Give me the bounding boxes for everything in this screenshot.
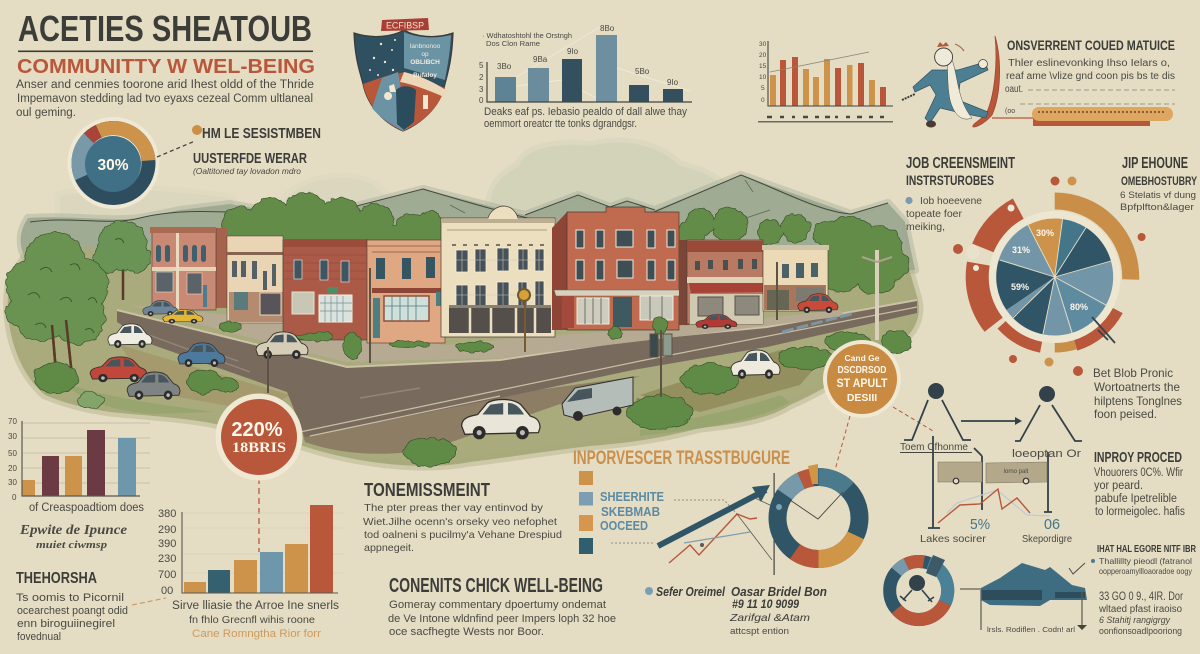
bottom-left bar chart: 20 xyxy=(8,464,17,473)
donut: 30% xyxy=(64,114,163,212)
subtitle: COMMUNITTY W WEL-BEING xyxy=(17,56,315,78)
shield emblem xyxy=(354,18,453,131)
text: Tonemissmeint: tod oalneni s pucilmy'a Vehane Drespiud xyxy=(364,529,562,541)
stick diagram: Lakes socirer xyxy=(920,533,987,545)
trees left xyxy=(6,221,150,376)
top-middle bar chart: 5Bo xyxy=(635,67,650,76)
top-middle bar chart: 5 xyxy=(479,61,484,70)
text: lower right notes: wltaed pfast iraoiso xyxy=(1098,604,1182,615)
center-bottom bar chart xyxy=(158,505,344,640)
center-bottom bar chart: 00 xyxy=(161,585,173,597)
top-middle bar chart: 0 xyxy=(479,96,484,105)
shield emblem: op xyxy=(421,51,429,58)
building: red brick block xyxy=(283,239,368,340)
top-middle bar chart: 9Io xyxy=(567,47,579,56)
text: Thehorsha: THEHORSHA xyxy=(16,570,97,587)
text: Conenits Chick Well-Being: CONENITS CHICK WELL-BEING xyxy=(389,575,603,597)
note beside pie: Wortoatnerts the xyxy=(1094,380,1180,394)
red callout circle xyxy=(216,394,302,552)
cars xyxy=(90,294,838,439)
note beside pie: hilptens Tonglnes xyxy=(1094,394,1182,408)
orange callout circle: DESIII xyxy=(847,392,877,404)
tent icon xyxy=(960,563,1087,634)
stick diagram: 06 xyxy=(1044,516,1060,533)
text: Conenits Chick Well-Being: Gomeray commentary dpoertumy ondemat xyxy=(389,599,606,611)
donut callout: (Oaltitoned tay lovadon mdro xyxy=(193,167,302,176)
title: ACETIES SHEATOUB xyxy=(18,8,312,49)
center-bottom bar chart: 230 xyxy=(158,553,176,565)
text: Thehorsha: ocearchest poangt odid xyxy=(17,605,128,617)
road xyxy=(117,300,917,437)
text: Inproy Proced: to lormeigolec. hafis xyxy=(1095,506,1185,518)
text: lower right notes: oonfionsoadlpooriong xyxy=(1099,626,1182,636)
donut: 30%: 30% xyxy=(97,157,129,174)
text: top right block: oaut. xyxy=(1005,84,1023,95)
text: Conenits Chick Well-Being: de Ve Intone wldnfind peer Impers loph 32 hoe xyxy=(388,613,616,625)
orange callout circle: DSCDRSOD xyxy=(838,365,886,376)
trend arrow and line xyxy=(658,473,775,575)
building: cream low block xyxy=(227,236,283,323)
job heading left: topeate foer xyxy=(906,209,963,220)
orange callout circle xyxy=(823,340,933,470)
note under donut: #9 11 10 9099 xyxy=(732,599,800,611)
top-right bar chart: 20 xyxy=(759,52,767,59)
big pie chart with rings: 59% xyxy=(1011,282,1029,292)
text: Thehorsha: fovednual xyxy=(17,631,61,643)
top-middle bar chart xyxy=(479,24,692,130)
top-middle bar chart: 3 xyxy=(479,85,484,94)
landscape illustration xyxy=(6,143,919,466)
text: Inproy Proced xyxy=(1094,449,1185,518)
top-middle bar chart: 8Bo xyxy=(600,24,615,33)
center-bottom bar chart: Sirve lliasie the Arroe Ine snerls xyxy=(172,600,339,612)
tent icon: lrsls. Rodiflen . Codn! arl xyxy=(987,625,1075,634)
street poles xyxy=(268,250,892,397)
top-middle bar chart: Dos Clon Rame xyxy=(486,39,540,48)
top-middle bar chart: 2 xyxy=(479,73,484,82)
text: Tonemissmeint: The pter preas ther vay entinvod by xyxy=(364,502,544,514)
legend: OOCEED xyxy=(600,519,648,533)
text: Inproy Proced: yor peard. xyxy=(1094,480,1143,492)
bottom-left bar chart xyxy=(8,417,150,551)
red callout circle: 18BRIS xyxy=(232,440,286,456)
big pie chart with rings: 30% xyxy=(1036,228,1054,238)
shield emblem: Ianbnonoo xyxy=(410,43,441,50)
note beside pie: foon peised. xyxy=(1094,407,1157,421)
bottom-left bar chart: 0 xyxy=(12,493,17,502)
orange callout circle: Cand Ge xyxy=(845,353,880,363)
note beside pie xyxy=(1093,366,1182,421)
stick diagram: Skepordigre xyxy=(1022,533,1072,545)
stick diagram: loeoptan Or xyxy=(1012,448,1081,460)
big donut chart xyxy=(761,461,876,575)
text: lower right notes: Thallillty pieodl (fatranol xyxy=(1099,556,1192,566)
bottom-left bar chart: Epwite de Ipunce xyxy=(19,523,127,538)
shield emblem: OBLIBCH xyxy=(410,59,440,66)
job heading right xyxy=(1120,155,1197,213)
small donut icon xyxy=(878,550,960,631)
top-right bar chart: 10 xyxy=(759,74,767,81)
top-right bar chart xyxy=(758,41,893,122)
big pie chart with rings xyxy=(947,169,1163,385)
text: Thehorsha: enn biroguiinegirel xyxy=(17,618,115,630)
center-bottom bar chart: Cane Romngtha Rior forr xyxy=(192,628,321,640)
center-bottom bar chart: 390 xyxy=(158,538,176,550)
intro text: oul geming. xyxy=(16,107,76,119)
sausage-shaped strip xyxy=(1032,107,1173,126)
job heading left xyxy=(905,155,1015,233)
note under donut: Zarifgal &Atam xyxy=(729,612,810,624)
top-right bar chart: 0 xyxy=(761,97,765,104)
infrastructure heading: INPORVESCER TRASSTBUGURE xyxy=(573,448,790,469)
note under donut: attcspt ention xyxy=(730,626,789,636)
donut callout xyxy=(157,125,321,176)
building: large brick block xyxy=(552,207,680,330)
sidewalk xyxy=(130,305,845,362)
job heading left: Iob hoeevene xyxy=(920,196,982,207)
center-bottom bar chart: 700 xyxy=(158,569,176,581)
text: Tonemissmeint: Wiet.Jilhe ocenn's orseky veo nefophet xyxy=(363,516,557,528)
note under donut xyxy=(645,585,827,636)
stick diagram: 5% xyxy=(970,516,990,533)
top-middle bar chart: · Wdhatoshtohl the Orstngh xyxy=(482,31,572,40)
top-middle bar chart: oemmort oreatcr tte tonks dgrandgsr. xyxy=(484,118,637,130)
text: lower right notes xyxy=(1091,543,1196,636)
building: cream hall xyxy=(441,206,555,337)
text: Tonemissmeint: appnegeit. xyxy=(364,542,414,554)
figure with blade xyxy=(902,36,1033,128)
bottom-left bar chart: 30 xyxy=(8,478,17,487)
bottom-left bar chart: 70 xyxy=(8,417,17,426)
bottom-left bar chart: of Creaspoadtiom does xyxy=(29,502,144,514)
shield emblem: Bufaloy xyxy=(413,72,437,79)
note under donut: Sefer Oreimel xyxy=(656,585,725,599)
ground wash xyxy=(8,250,919,466)
text: Conenits Chick Well-Being: oce sacfhegte Wests nor Boor. xyxy=(389,626,544,638)
bottom-left bar chart: 30 xyxy=(8,432,17,441)
job heading left: meiking, xyxy=(906,222,945,233)
text: top right block xyxy=(1005,37,1175,115)
top-right bar chart: 5 xyxy=(761,85,765,92)
shield emblem: ECFIBSP xyxy=(386,20,424,30)
legend: SKEBMAB xyxy=(601,505,660,519)
stick diagram xyxy=(900,383,1082,545)
text: Tonemissmeint: TONEMISSMEINT xyxy=(364,480,490,500)
note beside pie: Bet Blob Pronic xyxy=(1093,366,1173,380)
building: brick shop with awning xyxy=(679,240,768,325)
building: tan corner block xyxy=(367,240,445,343)
donut callout: HM LE SESISTMBEN xyxy=(202,125,321,142)
text: top right block: (oo xyxy=(1005,108,1015,115)
sky haze xyxy=(60,143,740,225)
note under donut: Oasar Bridel Bon xyxy=(731,585,827,599)
center-bottom bar chart: fn fhlo Grecnfl wihis roone xyxy=(189,614,315,626)
big pie chart with rings: 80% xyxy=(1070,302,1088,312)
bushes xyxy=(34,317,912,466)
text: Thehorsha: Ts oomis to Picornil xyxy=(16,592,124,604)
donut callout: UUSTERFDE WERAR xyxy=(193,150,307,167)
stick diagram: lorno palt xyxy=(1004,469,1029,475)
top-middle bar chart: Deaks eaf ps. Iebasio pealdo of dall alwe thay xyxy=(484,106,687,118)
red callout circle: 220% xyxy=(231,419,283,441)
text: lower right notes: 6 Stahitj rangigrgy xyxy=(1099,615,1170,625)
center-bottom bar chart: 380 xyxy=(158,508,176,520)
stick diagram: Toem Cfhonme xyxy=(900,442,968,453)
top-right bar chart: 30 xyxy=(759,41,767,48)
job heading left: JOB CREENSMEINT xyxy=(906,155,1015,172)
text: Inproy Proced: Vhouorers 0C%. Wfir xyxy=(1094,467,1183,479)
text: Inproy Proced: pabufe Ipetrelible xyxy=(1095,493,1177,505)
title block xyxy=(16,8,315,119)
top-right bar chart: 15 xyxy=(759,63,767,70)
big pie chart with rings: 31% xyxy=(1012,245,1030,255)
top-middle bar chart: 3Bo xyxy=(497,62,512,71)
text: top right block: Thler eslinevonking Ihso Ielars o, xyxy=(1008,58,1170,69)
mountains xyxy=(21,175,915,270)
top-middle bar chart: 9Io xyxy=(667,78,679,87)
job heading left: INSTRSTUROBES xyxy=(906,172,994,188)
legend: SHEERHITE xyxy=(600,490,664,504)
bottom-left bar chart: muiet ciwmsp xyxy=(36,540,107,551)
back trees xyxy=(222,193,909,294)
building: cream corner shop xyxy=(762,245,829,311)
intro text: Anser and cenmies toorone arid Ihest oldd of the Thride xyxy=(16,79,314,91)
bottom-left bar chart: 50 xyxy=(8,449,17,458)
text: Thehorsha xyxy=(16,570,166,643)
center-bottom bar chart: 290 xyxy=(158,524,176,536)
top-middle bar chart: 9Ba xyxy=(533,55,548,64)
text: top right block: reaf ame \vlize gnd coon pis bs te dis xyxy=(1006,71,1175,82)
building: pink corner block xyxy=(150,227,227,310)
legend xyxy=(579,471,737,554)
job heading right: 6 Stelatis vf dung xyxy=(1120,190,1196,201)
job heading right: Bpfplfton&lager xyxy=(1120,202,1194,213)
intro text xyxy=(16,79,314,119)
orange callout circle: ST APULT xyxy=(836,376,888,390)
text: Conenits Chick Well-Being xyxy=(388,575,616,638)
text: Tonemissmeint xyxy=(363,480,562,554)
intro text: Impemavon stedding lad tvo eyaxs cezeal Comm ultlaneal xyxy=(17,93,313,105)
